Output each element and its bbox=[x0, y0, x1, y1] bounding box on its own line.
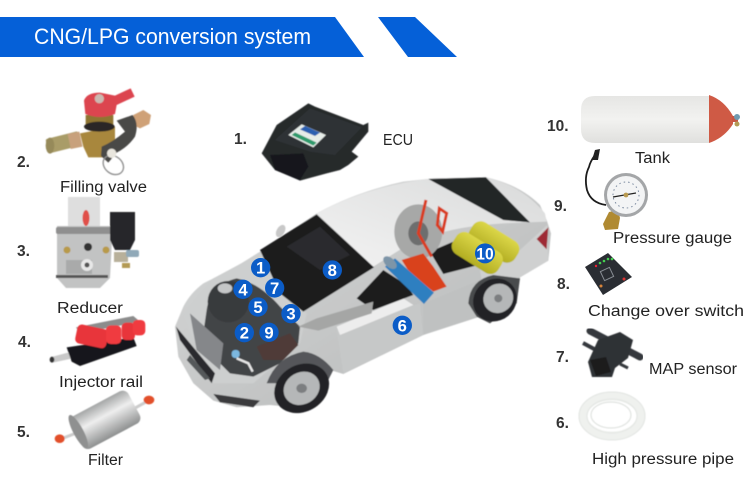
icon: pressure gauge bbox=[586, 149, 648, 230]
car body bbox=[175, 177, 551, 408]
icon: pipe coil bbox=[579, 392, 645, 440]
number 9: 9. bbox=[554, 198, 567, 215]
icon: ECU box bbox=[262, 103, 368, 181]
item 7: MAP sensor bbox=[556, 331, 737, 378]
badge 2: 2 bbox=[240, 324, 249, 343]
badge 5 bbox=[248, 297, 268, 317]
spare wheel bbox=[394, 204, 442, 259]
badge 7: 7 bbox=[270, 279, 279, 298]
roof bbox=[317, 177, 547, 267]
interior floor rear bbox=[430, 242, 478, 274]
label: Reducer bbox=[57, 300, 123, 317]
number 1: 1. bbox=[234, 131, 247, 148]
item 8: change over switch bbox=[557, 253, 744, 320]
header banner bbox=[0, 17, 457, 57]
number 10: 10. bbox=[547, 118, 569, 135]
yellow tanks bbox=[448, 218, 523, 278]
badge 3 bbox=[281, 304, 301, 324]
item 4: injector rail bbox=[18, 316, 145, 391]
sill highlight bbox=[337, 298, 413, 335]
title bar bbox=[0, 17, 364, 57]
decorative parallelogram bbox=[378, 17, 457, 57]
label: Tank bbox=[635, 150, 670, 167]
badge 1: 1 bbox=[256, 259, 265, 278]
number 3: 3. bbox=[17, 243, 30, 260]
label: Change over switch bbox=[588, 303, 744, 320]
rear window bbox=[428, 177, 530, 222]
badge 4 bbox=[233, 280, 253, 299]
front wheel arch bbox=[267, 352, 333, 383]
icon: filling valve bbox=[45, 88, 151, 179]
badge 6: 6 bbox=[398, 316, 407, 335]
red piping bbox=[418, 200, 447, 257]
badge 3: 3 bbox=[286, 305, 296, 324]
number 2: 2. bbox=[17, 154, 30, 171]
exhaust pipe bbox=[298, 302, 373, 331]
label: Pressure gauge bbox=[613, 230, 732, 247]
badge 8 bbox=[323, 260, 342, 280]
item 3: reducer bbox=[17, 197, 139, 317]
blue number badges bbox=[233, 243, 495, 343]
label: High pressure pipe bbox=[592, 451, 734, 468]
number 4: 4. bbox=[18, 334, 31, 351]
label: Injector rail bbox=[59, 374, 143, 391]
hood glass bbox=[183, 253, 307, 383]
label: Filter bbox=[88, 452, 123, 469]
icon: change over switch bbox=[585, 253, 632, 295]
blue cylinder bbox=[381, 254, 434, 304]
item 10: tank bbox=[547, 95, 740, 167]
badge 6 bbox=[393, 316, 412, 335]
rear wheel bbox=[464, 270, 526, 330]
title: CNG/LPG conversion system bbox=[34, 24, 311, 49]
badge 2 bbox=[235, 323, 254, 343]
item 1: ECU bbox=[234, 103, 413, 181]
badge 4: 4 bbox=[238, 280, 248, 299]
icon: gas tank bbox=[581, 95, 740, 143]
car illustration bbox=[175, 177, 551, 423]
number 8: 8. bbox=[557, 276, 570, 293]
tail light bbox=[537, 227, 548, 249]
icon: injector rail bbox=[50, 316, 145, 366]
interior floor front bbox=[357, 270, 413, 310]
badge 1 bbox=[251, 258, 270, 278]
item 5: filter bbox=[17, 388, 154, 469]
item 9: pressure gauge bbox=[554, 149, 732, 247]
rear quarter bbox=[480, 225, 548, 290]
windshield bbox=[260, 214, 374, 312]
label: Filling valve bbox=[60, 179, 147, 196]
badge 10: 10 bbox=[476, 244, 494, 263]
label: MAP sensor bbox=[649, 361, 737, 378]
icon: reducer bbox=[56, 197, 139, 288]
car drawing bbox=[175, 177, 551, 423]
dashboard detail bbox=[287, 227, 350, 270]
rear door panel bbox=[423, 280, 480, 335]
item 2: filling valve bbox=[17, 88, 151, 196]
number 6: 6. bbox=[556, 415, 569, 432]
number 5: 5. bbox=[17, 424, 30, 441]
item 6: high pressure pipe bbox=[556, 392, 734, 468]
icon: filter bbox=[55, 388, 154, 451]
badge 9 bbox=[259, 323, 279, 342]
icon: MAP sensor bbox=[583, 331, 640, 377]
side mirror bbox=[274, 223, 287, 239]
engine bay bbox=[190, 278, 300, 377]
badge 9: 9 bbox=[264, 323, 274, 342]
badge 8: 8 bbox=[328, 261, 337, 280]
badge 5: 5 bbox=[253, 298, 263, 317]
number 7: 7. bbox=[556, 349, 569, 366]
front door panel bbox=[337, 303, 423, 373]
badge 7 bbox=[265, 278, 284, 298]
label: ECU bbox=[383, 132, 413, 149]
front grille bbox=[176, 327, 215, 383]
front wheel bbox=[265, 354, 338, 423]
